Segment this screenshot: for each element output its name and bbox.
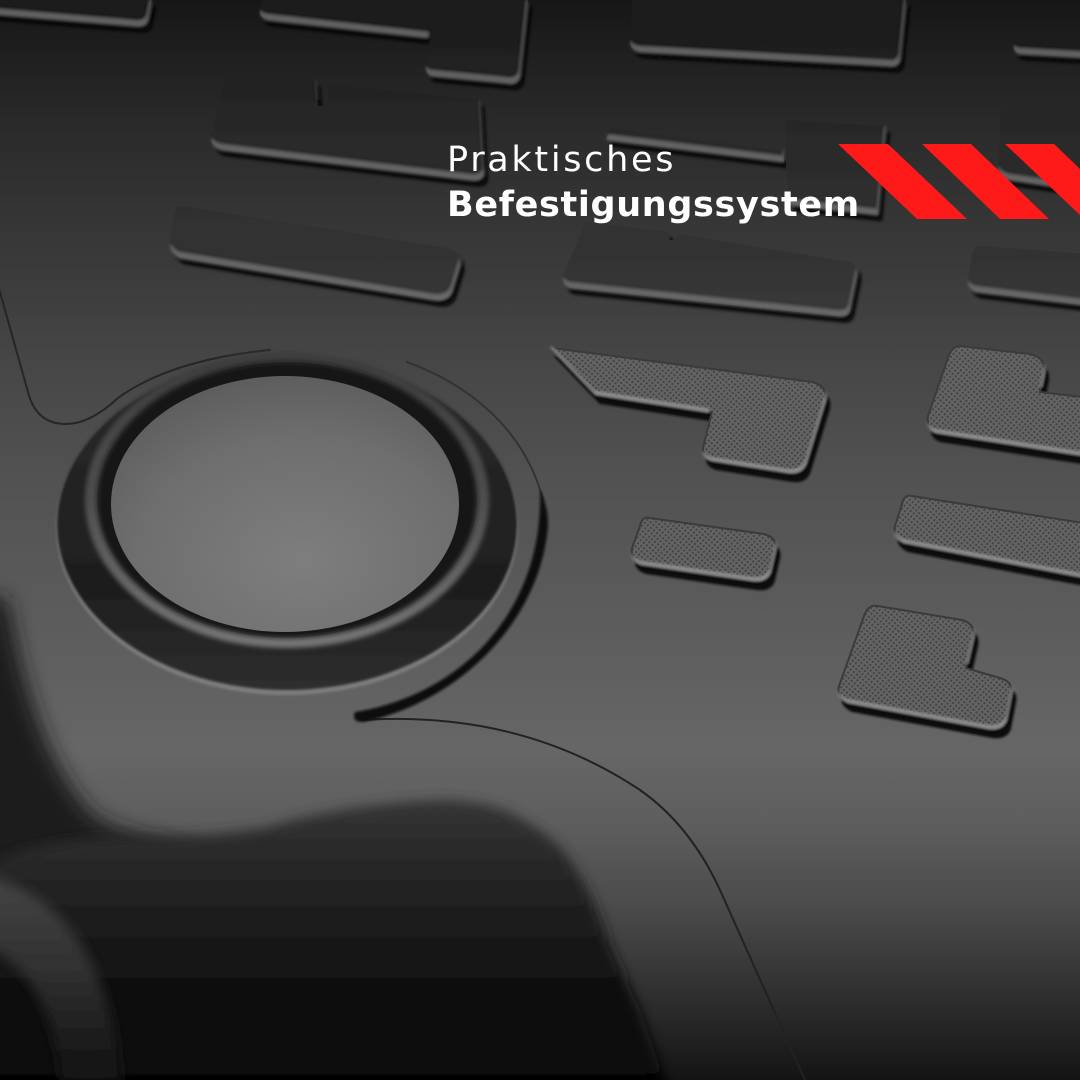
fastener rim lip bbox=[56, 359, 518, 695]
pad: long bar bbox=[894, 496, 1080, 578]
pad: lower L shape bbox=[838, 606, 1012, 728]
fastener inner groove bbox=[97, 362, 477, 638]
fastener light ridge bbox=[85, 352, 489, 648]
pad: small rectangle bbox=[632, 518, 776, 580]
corner raised form bbox=[0, 870, 125, 1080]
textured raised pads on right bbox=[552, 346, 1080, 728]
title: Befestigungssystem bbox=[447, 185, 860, 225]
fastener outer crescent bbox=[57, 358, 517, 690]
well shape bbox=[0, 800, 672, 1080]
title: Praktisches bbox=[447, 140, 676, 180]
fastener disc bbox=[111, 376, 459, 632]
left wall shadow bbox=[0, 590, 200, 930]
pad: right L shape bbox=[928, 346, 1080, 456]
icon: round fastener button bbox=[56, 352, 518, 695]
dark raised pads in upper rows bbox=[0, 0, 1080, 316]
groove lines on the mat bbox=[0, 285, 805, 1080]
curved slot beside the button bbox=[354, 490, 548, 722]
pad: arrow shaped bbox=[552, 348, 825, 472]
title bbox=[447, 140, 860, 225]
dark recessed foot well bbox=[0, 590, 672, 1080]
icon: red diagonal stripes bbox=[838, 144, 1080, 219]
